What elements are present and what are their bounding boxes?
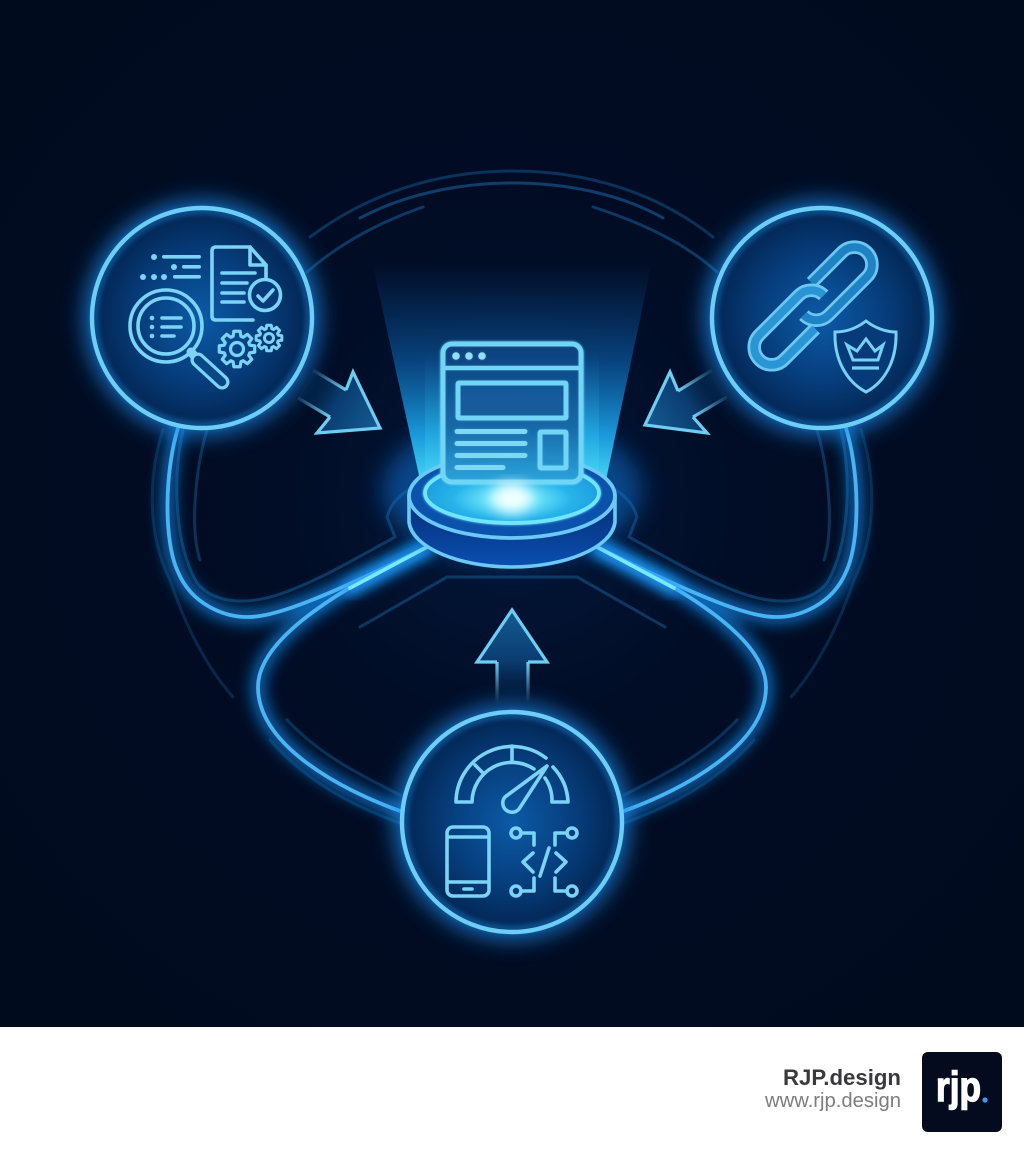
panel: bottom circle, performance and technical <box>396 706 628 938</box>
bright platform links <box>350 547 674 588</box>
icon: code and circuit <box>511 828 577 896</box>
arrow: from right circle to centre <box>645 370 727 433</box>
central platform and web page <box>372 262 652 567</box>
brand url: www.rjp.design <box>764 1090 901 1112</box>
icon: data list <box>140 254 201 280</box>
logo badge <box>922 1052 1002 1132</box>
icon: smartphone <box>447 827 489 896</box>
icon: shield with crown <box>835 321 896 392</box>
platform base <box>409 454 615 567</box>
icon: document with check <box>212 247 280 320</box>
light beam <box>372 262 652 562</box>
brand name: RJP.design <box>783 1065 901 1090</box>
platform glow spot <box>492 483 532 513</box>
icon: gears <box>219 325 282 367</box>
left connector curve <box>167 428 427 617</box>
web page icon <box>443 344 581 482</box>
logo badge: rjp <box>936 1063 981 1110</box>
faint outer arcs <box>152 171 872 823</box>
arrow: from bottom circle to centre <box>477 610 547 703</box>
arrow: from left circle to centre <box>298 370 380 433</box>
icon: chain links <box>747 240 879 372</box>
icon: magnifying glass <box>130 290 222 382</box>
icon: speed gauge <box>456 746 568 812</box>
connector curves <box>167 428 857 812</box>
panel: left circle, content analysis <box>86 202 318 434</box>
lower left connector curve <box>258 547 427 812</box>
footer band <box>0 1027 1024 1154</box>
panel: right circle, links and authority <box>706 202 938 434</box>
right connector curve <box>597 428 857 617</box>
lower right connector curve <box>597 547 766 812</box>
